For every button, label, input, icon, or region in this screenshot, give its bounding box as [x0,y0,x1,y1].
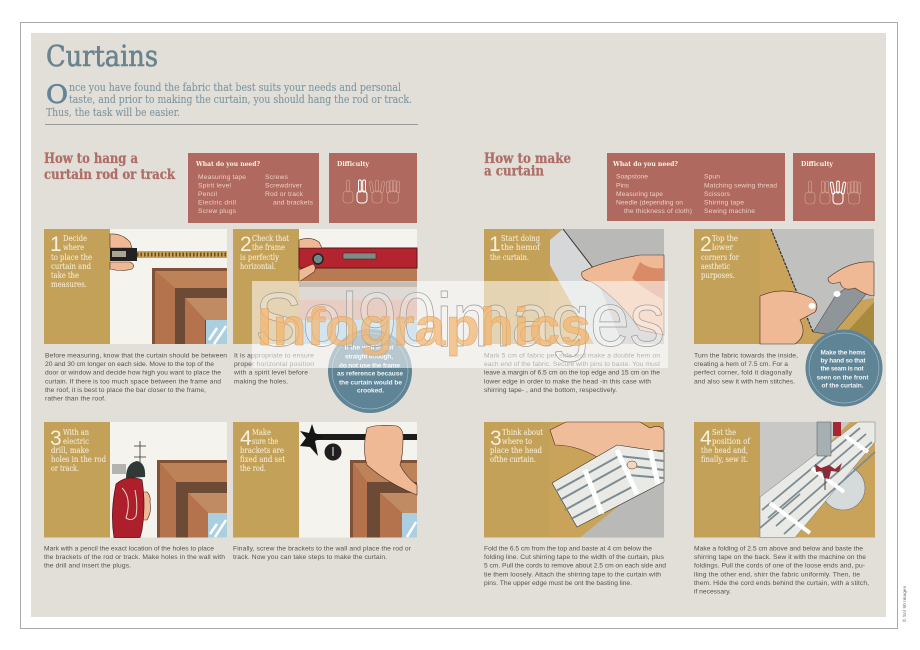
heading: how to make: a curtain [484,164,544,180]
body text: Mark 5 cm of fabric per side and make a double hem on [484,352,660,360]
icon: one finger hand [805,181,815,204]
body text: door or window and decide how high you want to place the [45,370,221,376]
panel: what do you need, curtain: Spun [704,174,720,180]
callout: straight enough: straight enough, [345,354,393,360]
title: Curtains [46,39,158,73]
panel: curtain step 3 [484,422,666,587]
panel: curtain step 1: Start doing [501,234,540,243]
body text [694,352,798,386]
icon: four finger hand [386,180,400,203]
panel: what do you need, rod: Screws [265,174,289,181]
panel: what do you need, curtain: Pins [616,182,630,190]
intro paragraph: nce you have found the fabric that best suits your needs and personal [69,80,401,94]
panel: rod step 1: where [63,243,84,252]
panel: what do you need, curtain: Shirring tape [704,200,744,206]
panel: rod step 2: horizontal. [240,262,276,271]
body text: track. Now you can take steps to make the curtain. [233,554,387,561]
intro paragraph: taste, and prior to making the curtain, you should hang the rod or track. [69,92,412,106]
panel: what do you need, rod: Measuring tape [198,174,246,181]
body text: Finally, screw the brackets to the wall and place the rod or [233,546,412,552]
body text: It is appropriate to ensure [234,352,314,360]
panel: what do you need, rod: Screwdriver [265,182,303,190]
body text [45,352,227,402]
body text: 5 cm. Pull the cords to remove about 2.5 cm on each side and [484,562,666,570]
panel: curtain step 4: the head and, [701,446,748,455]
panel: curtain step 1: the curtain. [490,253,529,262]
panel: rod step 3: or track. [51,464,79,473]
panel: what do you need, rod: and brackets [273,200,314,206]
illustration: drilling the wall [110,422,227,538]
panel: rod step 1: measures. [51,280,87,289]
panel: curtain step 4: 4 [700,427,712,450]
panel: what do you need, rod: Electric drill [198,200,236,206]
panel: rod step 2: the frame [252,243,285,252]
body text: Make a folding of 2.5 cm above and below and baste the [694,546,863,552]
icon: three finger hand, selected [830,181,846,204]
callout: hem by hand [806,330,882,406]
body text: rather than the roof. [45,396,106,402]
body text: each end of the fabric. Secure with pins to baste. You must [484,361,660,368]
body text: curtain. If there is too much space between the frame and [45,378,221,386]
panel: curtain step 2: 2 [700,233,712,256]
panel: curtain step 1 [484,229,664,394]
intro paragraph: O [46,80,68,109]
icon: four finger hand [848,181,860,204]
watermark: Infographics [257,298,591,357]
panel: rod step 1: curtain and [51,262,91,271]
panel: curtain step 2: lower [712,243,733,252]
panel: curtain step 4: finally, sew it. [701,455,748,464]
panel: rod step 2: is perfectly [240,253,279,262]
panel: curtain step 4: position of [712,437,751,446]
callout: straight enough: the curtain would be [339,380,402,386]
panel: what do you need, curtain: What do you need? [612,160,678,168]
panel: what do you need, curtain: the thickness of cloth) [624,208,692,215]
icon: one finger hand [343,180,353,203]
panel: difficulty, curtain: Difficulty [801,160,833,168]
watermark: Sol90images [255,278,665,363]
body text: perfect corner, fold it diagonally [694,370,793,376]
illustration: spirit level on frame [299,229,417,344]
heading: how to make [484,151,571,180]
body text: shirring tape- , and the bottom, respectively. [484,387,617,394]
panel: curtain step 3: Think about [502,428,544,437]
panel: rod step 1: take the [51,271,79,280]
credit: © Sol 90 Images [901,585,907,622]
callout: straight enough [328,329,412,413]
panel: rod step 2: 2 [240,233,252,256]
heading: how to make: How to make [484,151,571,167]
panel: what do you need, curtain: Soapstone [616,174,648,180]
panel: curtain step 2: corners for [701,253,739,262]
panel: rod step 4 [233,422,417,561]
panel: what do you need, curtain: Scissors [704,191,731,198]
panel: rod step 4: the rod. [240,464,266,473]
panel: rod step 1: to place the [51,253,92,262]
body text: shirring tape on the back. Sew it with the machine on the [694,554,866,561]
panel: rod step 3: drill, make [51,446,89,455]
intro paragraph: Thus, the task will be easier. [46,105,180,119]
panel: rod step 4: brackets are [240,446,284,455]
icon: three finger hand [369,180,385,203]
body text: leave a margin of 6.5 cm on the top edge and 15 cm on the [484,370,660,376]
panel: curtain step 3: 3 [490,427,502,450]
panel: rod step 3 [44,422,227,570]
body text: Mark with a pencil the exact location of the holes to place [44,546,214,552]
panel: rod step 1: Decide [63,234,87,243]
body text: proper horizontal position [234,361,314,368]
panel: difficulty, rod: Difficulty [337,160,369,168]
body text: them. Hide the cord ends behind the curtain, with a stitch, [694,580,869,587]
panel: what do you need, rod: Rod or track [265,191,304,198]
body text: foldings. Pull the cords of one of the loose ends and, pu- [694,562,865,570]
heading: how to hang [44,151,176,183]
illustration: fixing the rod [299,422,417,538]
panel: rod step 1: 1 [50,233,62,256]
body text: pins. The upper edge must be ont the basting line. [484,580,632,587]
panel: what do you need, rod: Screw plugs [198,208,237,215]
panel: rod step 3: electric [63,437,89,446]
body text [484,352,660,394]
body text: the drill and insert the plugs. [44,562,131,570]
panel: rod step 3: holes in the rod [51,455,106,464]
body text: and also sew it with hem stitches. [694,378,795,386]
panel: what do you need, rod: Pencil [198,191,218,198]
panel: rod step 2 [233,229,417,413]
body text: tie them loosely. Attach the shirring tape to the curtain with [484,572,661,578]
body text: if necessary. [694,588,731,596]
panel: rod step 4: sure the [252,437,278,446]
body text: the brackets of the rod or track. Make holes in the wall with [44,554,225,561]
body text [233,546,412,561]
body text [44,546,225,570]
illustration: measuring the wall [110,229,227,344]
panel: what do you need, curtain: Matching sewing thread [704,182,777,190]
panel: curtain step 4: Set the [712,428,736,437]
panel: what do you need, rod: Spirit level [198,182,232,190]
body text: creating a hem of 7.5 cm. For a [694,361,788,368]
illustration: shirring tape [550,422,664,538]
body text: with a spirit level before [233,370,308,376]
panel: rod step 4: Make [252,428,271,437]
panel: curtain step 1: the hemof [501,243,541,252]
heading: how to hang: curtain rod or track [44,167,176,183]
body text: Fold the 6.5 cm from the top and baste at 4 cm below the [484,546,652,552]
body text: 20 and 30 cm longer on each side. Move to the top of the [45,361,214,368]
callout: hem by hand: Make the hems [820,350,866,356]
body text: lling the other end, shirr the fabric uniformly. Then, tie [694,572,860,578]
panel: what do you need, rod [188,153,319,223]
panel: rod step 3: With an [63,428,89,437]
callout: straight enough: If the wall is not [345,344,394,352]
callout: straight enough: crooked. [357,388,384,394]
body text: the roof, it is best to place the bar closer to the frame, [45,387,206,394]
icon: two finger hand, selected [357,180,367,203]
intro paragraph [46,80,412,119]
callout: straight enough: do not use the frame [339,362,400,370]
illustration: folding the corner [760,229,874,344]
body text: Turn the fabric towards the inside, [694,352,798,360]
illustration: folding the hem [550,229,664,344]
panel: what do you need, curtain: Measuring tape [616,191,663,198]
body text: folding line. Cut shirring tape to the width of the curtain, plus [484,554,665,561]
panel: what do you need, rod: What do you need? [195,160,260,168]
panel: difficulty, curtain [793,153,875,221]
panel: rod step 4: 4 [240,427,252,450]
panel: rod step 3: 3 [50,427,62,450]
body text: Before measuring, know that the curtain should be between [45,352,227,360]
panel: curtain step 2 [694,229,882,406]
panel: rod step 1 [44,229,227,402]
panel: rod step 2: Check that [252,234,290,243]
callout: hem by hand: by hand so that [820,358,866,364]
panel: curtain step 3: place the head [490,446,542,455]
panel: what do you need, curtain [607,153,785,221]
body text [484,546,666,587]
body text [694,546,869,596]
callout: hem by hand: the seam is not [820,366,864,372]
panel: curtain step 2: purposes. [701,271,735,280]
panel: difficulty, rod [329,153,417,223]
callout: hem by hand: of the curtain. [822,382,864,390]
heading: how to hang: How to hang a [44,151,138,167]
callout: hem by hand: seen on the front [816,374,869,382]
icon: two finger hand [820,181,830,204]
body text: lower edge in order to make the head -in this case with [484,378,651,386]
panel: curtain step 3: ofthe curtain. [490,455,536,464]
panel: curtain step 2: aesthetic [701,262,730,271]
body text: making the holes. [234,378,288,386]
callout: straight enough: as reference because [337,370,403,378]
illustration: sewing machine [760,422,875,538]
panel: rod step 4: fixed and set [240,455,286,464]
panel: curtain step 4 [694,422,875,596]
panel: curtain step 3: where to [502,437,532,446]
panel: curtain step 1: 1 [489,233,501,256]
panel: curtain step 2: Top the [712,234,738,243]
panel: what do you need, curtain: Needle (depending on [616,200,683,206]
body text [233,352,314,386]
panel: what do you need, curtain: Sewing machine [704,208,755,215]
